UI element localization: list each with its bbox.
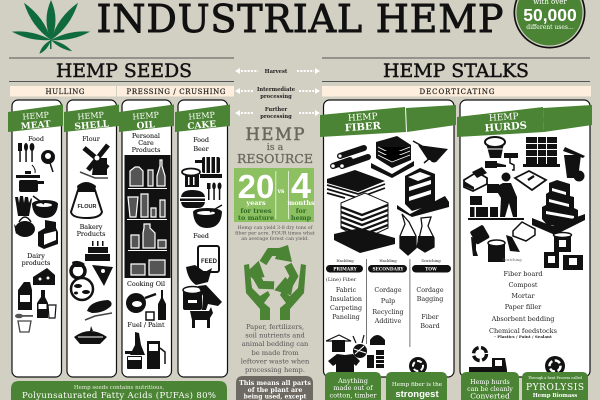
panel: hemp cake [175, 100, 230, 377]
icon: yogurt [18, 321, 31, 332]
panel: 20 vs 4 comparison: hemp [291, 214, 312, 222]
callout: strongest [386, 372, 447, 400]
icon: pot [16, 165, 44, 192]
icon: large pallet of boards [334, 193, 395, 253]
panel: hemp shell: Products [77, 230, 105, 238]
callout: hurds converted: Hemp hurds [470, 379, 510, 386]
panel: 20 vs 4 comparison: 20 [238, 168, 274, 205]
column: hackling primary: Hackling [336, 258, 354, 263]
icon: glass [48, 305, 56, 318]
column: hackling secondary: Hackling [379, 258, 397, 263]
arrows: process labels: Intermediate [257, 87, 296, 93]
banner: cake: CAKE [187, 120, 217, 132]
text: yield note: fiber per acre. FOUR times what [235, 230, 315, 236]
banner: oil: HEMP [132, 110, 160, 122]
text: yield note: an average forest can yield. [241, 236, 309, 242]
icon: gas pump [147, 341, 165, 369]
text: leftover waste: soil nutrients and [245, 332, 306, 340]
icon: hand trowel [506, 235, 520, 252]
arrows: process labels: processing [260, 114, 292, 120]
icon: pallet of bricks [523, 137, 560, 167]
panel: 20 vs 4 comparison: for [296, 207, 307, 215]
icon: milk bottle [37, 290, 48, 318]
banner: oil: OIL [136, 120, 156, 132]
icon: lollipop [41, 150, 55, 172]
icon: stacked boards [327, 170, 385, 198]
icon: spoon [15, 314, 33, 318]
icon: recycle symbol [474, 348, 486, 360]
heading: hemp is a resource: is a [267, 142, 284, 153]
banner: meat [8, 104, 63, 132]
panel: hemp meat [8, 100, 63, 377]
panel: 20 vs 4 comparison: to mature [238, 214, 274, 222]
icon: windmill [84, 145, 108, 175]
banner: shell: HEMP [77, 110, 105, 122]
text: hurds uses: Compost [508, 281, 538, 289]
callout: made out of cotton: Anything [337, 377, 368, 385]
icon: bricklayer and wall [468, 172, 524, 220]
icon: flour bag [71, 182, 102, 218]
banner: fiber: FIBER [344, 121, 382, 134]
icon: bowl [32, 196, 58, 218]
banner: fiber [320, 105, 456, 137]
arrows: process labels: processing [260, 94, 292, 100]
text: leftover waste: processing hemp. [245, 366, 305, 374]
icon: milk carton [38, 220, 58, 249]
callout: made out of cotton [325, 372, 381, 400]
text: yield note [235, 225, 315, 242]
icon: wheat [80, 172, 108, 178]
column: hackling secondary: SECONDARY [372, 268, 404, 273]
icon: logs [331, 148, 368, 168]
column: hackling secondary [368, 258, 407, 325]
arrows: process labels: Harvest [265, 69, 288, 75]
icon: recycling hands [244, 245, 306, 320]
text: hurds uses: Absorbent bedding [491, 315, 554, 323]
panel: 20 vs 4 comparison [234, 165, 315, 222]
column: hackling primary: (Line) Fiber [326, 276, 357, 283]
banner: hurds [457, 105, 592, 137]
panel: hemp meat: Food [28, 135, 44, 143]
icon: fries [15, 196, 32, 216]
icon: pet food can [183, 286, 202, 310]
icon: pizza [71, 278, 93, 300]
process band: pressing [117, 86, 234, 96]
banner: hurds: HURDS [484, 121, 527, 134]
banner: shell: SHELL [74, 119, 110, 132]
panel: hemp meat: Dairy [27, 252, 45, 260]
banner: fiber: HEMP [348, 112, 378, 124]
callout: pyrolysis: Hemp Biomass [533, 393, 577, 399]
icon: hanger with cloth [326, 335, 351, 352]
heading: hemp is a resource: HEMP [246, 125, 304, 144]
text: leftover waste: animal bedding can [242, 340, 309, 348]
icon: t-shirt [328, 354, 360, 375]
arrows: process labels [235, 68, 320, 120]
text: hurds uses: - Plastics / Paint / Sealant [494, 334, 552, 339]
callout: pyrolysis: PYROLYSIS [526, 383, 584, 393]
icon: truck [469, 358, 507, 380]
badge: 50,000 uses: different uses... [526, 24, 574, 31]
heading: hemp is a resource [237, 125, 313, 166]
icon: paint can [127, 356, 142, 369]
icon: bread [87, 300, 112, 313]
panel: hemp cake: Food [193, 136, 209, 144]
icon: yarn ball [353, 335, 367, 358]
panel: hemp shell: Bakery [80, 223, 103, 231]
icon: small jar [146, 312, 154, 320]
icon: pie [74, 326, 107, 344]
icon: pallet of blocks [532, 180, 585, 235]
icon: pouring paint can [470, 224, 490, 256]
icon: cheese [33, 268, 55, 285]
icon: barrel [195, 157, 222, 178]
text: hurds uses: Mortar [511, 292, 536, 300]
banner: cake: HEMP [188, 110, 216, 122]
column: hackling primary [326, 258, 363, 321]
panel: hemp fiber [320, 100, 456, 400]
callout: made out of cotton: cotton, timber [330, 392, 377, 400]
column: scutching tow: Board [420, 323, 440, 330]
icon: brick [513, 222, 535, 241]
process band: decorticating [322, 86, 591, 96]
icon: paint roller and brush [485, 153, 518, 170]
text: leftover waste: Paper, fertilizers, [246, 323, 304, 331]
icon: spools [367, 350, 384, 368]
text: hurds uses [489, 270, 557, 339]
panel: hemp hurds: Scutching [502, 257, 522, 262]
icon: bricks [464, 167, 487, 191]
callout: hurds converted: can be cleanly [467, 386, 513, 393]
icon: oil bottle [158, 290, 166, 320]
column: scutching tow [412, 258, 451, 330]
panel: 20 vs 4 comparison: for trees [240, 207, 272, 215]
banner: shell [64, 104, 119, 132]
process band: pressing: PRESSING / CRUSHING [126, 88, 226, 96]
icon: pallet of bundles [397, 168, 449, 217]
icon: stacked cans [544, 232, 583, 270]
icon: cat [190, 307, 213, 328]
panel: hemp shell [64, 100, 119, 377]
panel: hemp oil: Fuel / Paint [127, 321, 165, 329]
icon: cutlery [207, 182, 222, 200]
icon: recycle circle [409, 357, 427, 375]
shelf block: personal care products [124, 155, 170, 278]
column: scutching tow: Cordage [416, 287, 444, 294]
column: hackling primary: PRIMARY [333, 268, 358, 273]
callout: all parts used: of the plant are [248, 387, 302, 394]
panel: hemp oil: Personal [132, 132, 160, 140]
icon: paint bucket [485, 137, 505, 158]
callout: hurds converted [461, 372, 519, 400]
banner: oil [119, 104, 174, 132]
panel: hemp cake: Feed [193, 232, 209, 240]
text: hurds uses: Paper filler [505, 303, 542, 311]
column: hackling primary: Paneling [332, 314, 360, 321]
panel: hemp oil [119, 100, 174, 377]
badge: 50,000 uses: 50,000 [523, 5, 577, 25]
icon: pie slice [92, 265, 113, 286]
banner: cake [175, 104, 230, 132]
column: scutching tow: TOW [425, 268, 437, 273]
column: scutching tow: Fiber [421, 314, 440, 321]
column: scutching tow: Bagging [417, 296, 443, 303]
text: hurds uses: Fiber board [504, 270, 542, 278]
column: hackling primary: Carpeting [330, 305, 362, 312]
callout: PUFAs [11, 381, 227, 400]
icon: bowl [193, 205, 222, 228]
text: leftover waste [241, 323, 310, 374]
icon: flour bag: FLOUR [78, 204, 96, 210]
icon: burger [180, 190, 205, 208]
icon: bags [400, 214, 434, 255]
icon: chicken [186, 265, 212, 285]
column: hackling primary: Fabric [336, 287, 357, 294]
process band: hulling: HULLING [46, 88, 85, 96]
icon: feed bag [198, 246, 219, 272]
callout: strongest: Hemp fiber is the [392, 382, 443, 388]
callout: all parts used: This means all parts [239, 380, 311, 387]
panel: hemp oil: Products [132, 146, 160, 154]
column: hackling secondary: Additive [374, 318, 401, 325]
icon: trowel [515, 171, 546, 190]
panel: hemp shell: Flour [82, 135, 101, 143]
panel: 20 vs 4 comparison: 4 [291, 165, 311, 206]
process band: decorticating: DECORTICATING [420, 88, 495, 96]
column: hackling secondary: Cordage [374, 287, 402, 294]
banner: hurds: HEMP [489, 112, 519, 124]
column: scutching tow: Scutching [421, 258, 441, 263]
panel: hemp cake: Beer [193, 145, 210, 153]
callout: pyrolysis: Through a heat Process called [528, 376, 583, 380]
panel: 20 vs 4 comparison: months [287, 199, 315, 207]
icon: dog [198, 285, 222, 310]
text: leftover waste: leftover waste when [241, 358, 310, 366]
icon: wheat lower [85, 313, 112, 320]
icon: feed bag: FEED [201, 259, 218, 265]
callout: all parts used [236, 376, 313, 400]
callout: PUFAs: Hemp seeds contains nutritious, [74, 385, 164, 391]
panel: hemp meat: products [22, 259, 50, 267]
callout: made out of cotton: made out of [333, 384, 373, 392]
panel: hemp oil: Care [138, 139, 154, 147]
panel: hemp hurds [457, 100, 592, 400]
icon: wheelbarrow [413, 141, 448, 163]
icon: teapot [14, 217, 35, 237]
panel: 20 vs 4 comparison: vs [277, 188, 285, 195]
icon: paint roller [125, 332, 145, 355]
icon: pincushion [370, 335, 385, 345]
column: hackling secondary: Pulp [381, 298, 395, 305]
text: hurds uses: Chemical feedstocks [489, 327, 557, 335]
icon: paint can [488, 240, 505, 262]
arrows: process labels: Further [265, 107, 287, 113]
callout: strongest: strongest [395, 389, 439, 400]
section heading: hemp seeds: HEMP SEEDS [56, 60, 192, 82]
icon: cutlery [18, 143, 34, 162]
icon: milk carton small [18, 282, 32, 310]
icon: beer mug [182, 168, 200, 187]
banner: meat: MEAT [20, 120, 52, 132]
text: yield note: Hemp can yield 3-8 dry tons of [238, 225, 314, 231]
icon: pallet of sheets [371, 136, 414, 178]
icon: birthday cake [85, 241, 110, 261]
column: hackling primary: Insulation [330, 296, 362, 303]
banner: meat: HEMP [22, 110, 50, 122]
text: leftover waste: be made from [251, 349, 299, 357]
process band: hulling [10, 86, 116, 96]
badge: 50,000 uses [514, 0, 586, 48]
icon: bundt cake [71, 261, 85, 278]
panel: hemp oil: Cooking Oil [127, 280, 165, 288]
icon: hemp leaf [11, 0, 91, 55]
icon: frying pan [126, 293, 156, 313]
callout: pyrolysis [522, 372, 588, 400]
icon: pyrolysis circle [545, 356, 565, 376]
section heading: hemp stalks: HEMP STALKS [383, 60, 529, 82]
panel: 20 vs 4 comparison: years [245, 199, 266, 207]
heading: hemp is a resource: RESOURCE [237, 151, 313, 166]
icon: trash bin [563, 147, 585, 182]
column: hackling secondary: Recycling [372, 309, 404, 316]
